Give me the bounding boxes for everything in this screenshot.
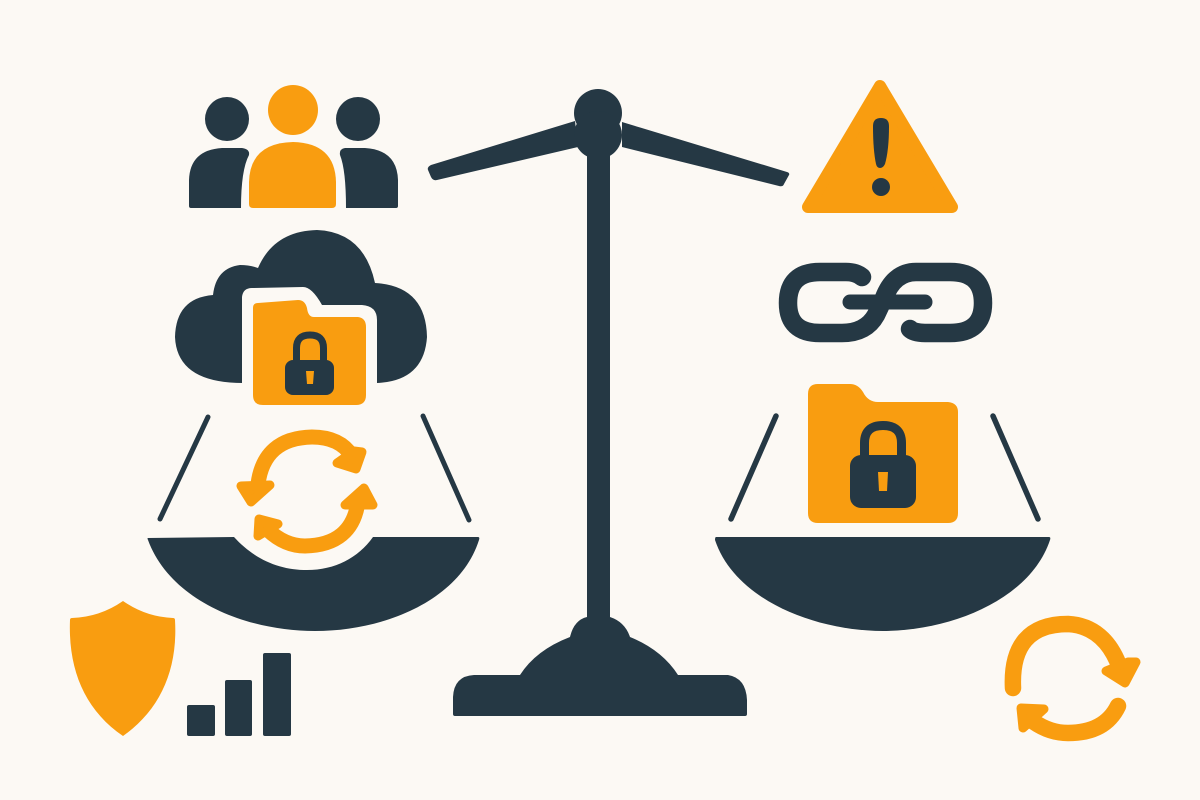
icon: right pan <box>715 537 1050 631</box>
icon: scale stand and beam <box>428 89 789 716</box>
icon: orange refresh arrows right <box>1013 624 1136 733</box>
icon: padlock large <box>850 426 916 508</box>
icon: warning triangle <box>808 86 952 207</box>
icon: people group <box>189 85 398 208</box>
icon: padlock <box>285 335 334 395</box>
icon: cloud with locked folder <box>175 230 427 405</box>
icon: left pan strings <box>160 416 469 520</box>
icon: left pan <box>148 537 479 631</box>
icon: orange refresh arrows left <box>241 437 373 546</box>
icon: bar chart <box>187 653 291 736</box>
icon: shield <box>70 601 175 736</box>
icon: right locked folder <box>808 384 958 523</box>
icon: right pan strings <box>731 416 1038 519</box>
icon: broken chain link <box>788 272 983 333</box>
